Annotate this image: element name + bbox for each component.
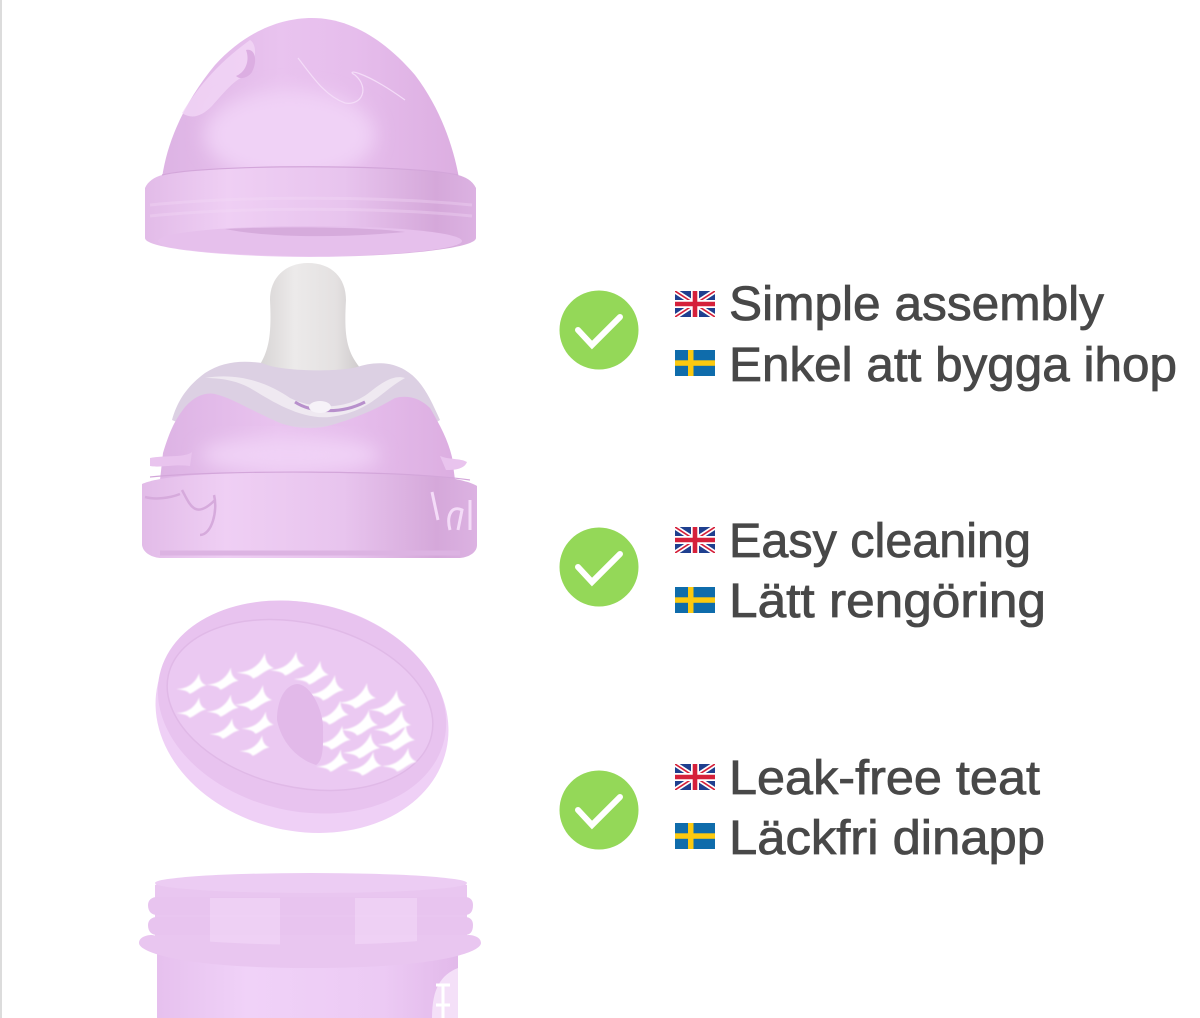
silicone teat [258,263,362,390]
bottle body [139,873,481,1018]
feature 1 labels: Enkel att bygga ihop [729,339,1177,392]
feature 2 labels: Easy cleaning [729,515,1031,568]
collar dome [160,394,455,480]
feature 3 labels [675,752,1045,865]
check icon: easy cleaning [560,528,638,606]
transparent flange [172,362,440,432]
outer cap [145,18,476,257]
central post [277,684,323,765]
feature 1 labels: Simple assembly [729,278,1104,331]
feature 1 labels [675,278,1177,392]
feature 2 labels: Lätt rengöring [729,575,1046,628]
teat and collar [142,263,477,558]
feature 3 labels: Leak-free teat [729,752,1040,805]
page left edge line [0,0,2,1018]
check icon: leak-free teat [560,770,638,850]
vent filter disc [132,573,472,861]
check icon: simple assembly [560,290,638,370]
feature 2 labels [675,515,1046,628]
feature 3 labels: Läckfri dinapp [729,812,1045,865]
